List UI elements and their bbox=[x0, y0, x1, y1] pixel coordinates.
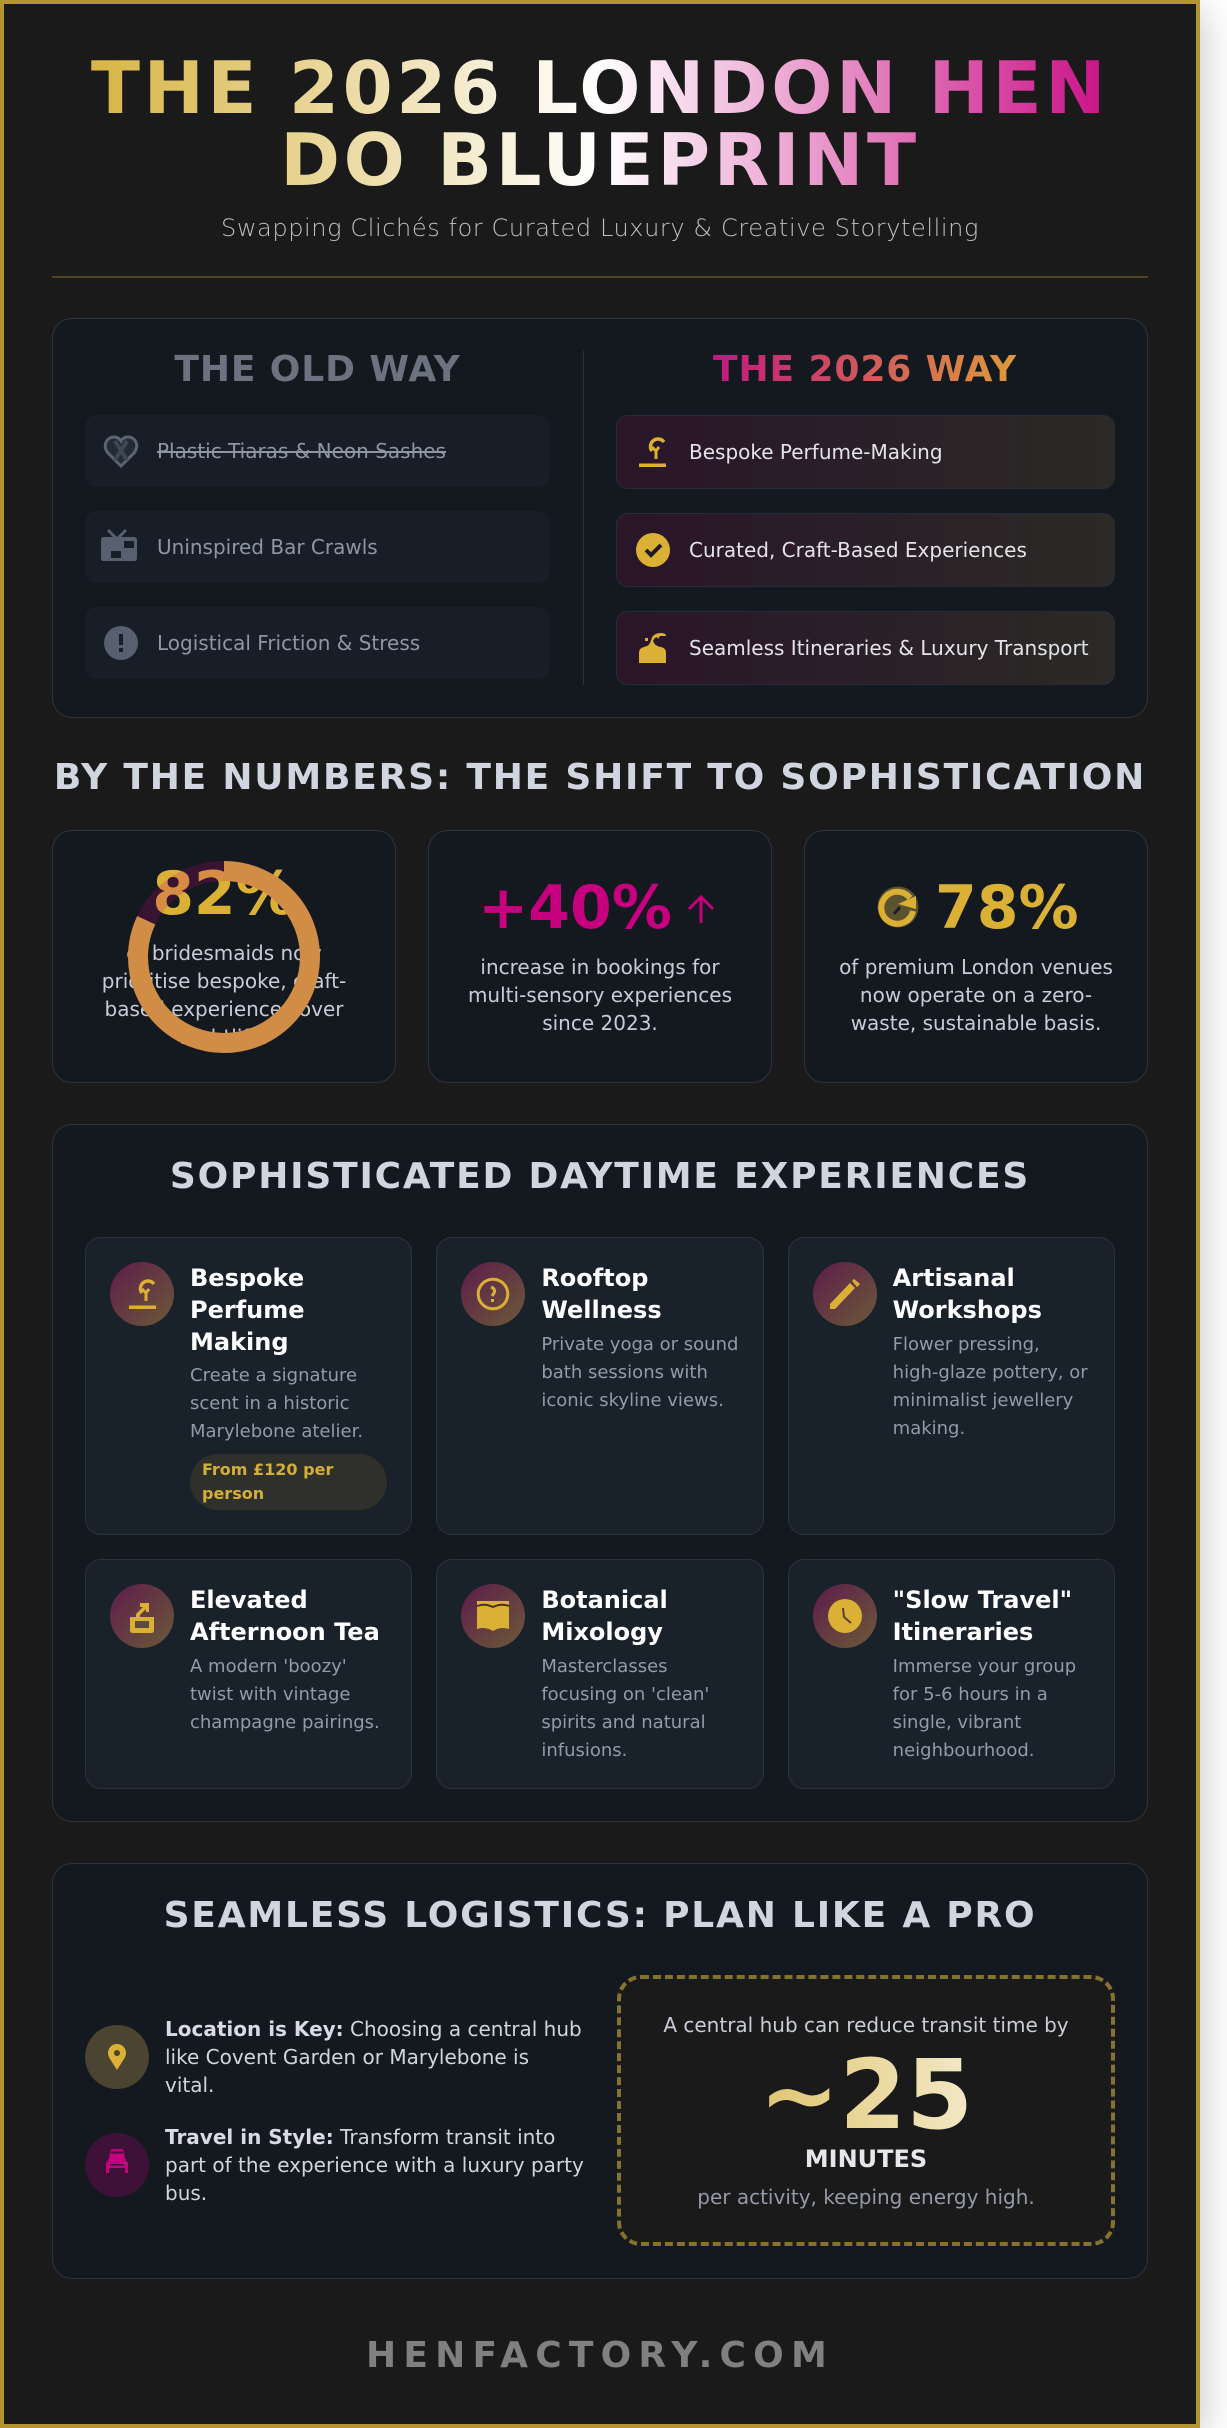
card: artisanal workshops bbox=[788, 1237, 1115, 1535]
stat text 78%: waste, sustainable basis. bbox=[851, 1011, 1101, 1035]
card title: "Slow Travel" bbox=[893, 1586, 1072, 1614]
stat card: 78% bbox=[804, 830, 1148, 1083]
text: location is key: vital. bbox=[165, 2073, 214, 2097]
new item: seamless: Seamless Itineraries & Luxury Transport bbox=[689, 636, 1089, 660]
card title: Making bbox=[190, 1328, 289, 1356]
card title: Itineraries bbox=[893, 1618, 1033, 1646]
stat text 82%: nightlife. bbox=[180, 1025, 268, 1049]
card title: Mixology bbox=[541, 1618, 663, 1646]
card title bbox=[190, 1264, 305, 1356]
stat text 82%: of bridesmaids now bbox=[126, 941, 322, 965]
card description: Create a signature bbox=[190, 1365, 357, 1386]
card description: spirits and natural bbox=[541, 1712, 706, 1733]
icon: perfume bbox=[110, 1262, 174, 1326]
card description: champagne pairings. bbox=[190, 1712, 380, 1733]
card title bbox=[541, 1586, 668, 1646]
subtitle: Swapping Clichés for Curated Luxury & Creative Storytelling bbox=[221, 214, 979, 242]
icon: clock bbox=[813, 1584, 877, 1648]
card description: Marylebone atelier. bbox=[190, 1421, 363, 1442]
stat text +40% bbox=[468, 955, 732, 1035]
card title bbox=[541, 1264, 662, 1324]
text: location is key: like Covent Garden or Marylebone is bbox=[165, 2045, 529, 2069]
card description: Masterclasses bbox=[541, 1656, 668, 1677]
heading: logistics: SEAMLESS LOGISTICS: PLAN LIKE A PRO bbox=[164, 1895, 1036, 1936]
card description bbox=[541, 1334, 738, 1411]
new item: curated bbox=[616, 513, 1115, 587]
card description: iconic skyline views. bbox=[541, 1390, 724, 1411]
icon: crossed heart bbox=[104, 436, 138, 468]
heading: experiences: SOPHISTICATED DAYTIME EXPERIENCES bbox=[170, 1156, 1030, 1197]
card title: Workshops bbox=[893, 1296, 1042, 1324]
card description: infusions. bbox=[541, 1740, 627, 1761]
card description bbox=[893, 1334, 1088, 1439]
new item: perfume bbox=[616, 415, 1115, 489]
card description bbox=[893, 1656, 1076, 1761]
stat text 82%: prioritise bespoke, craft- bbox=[102, 969, 346, 993]
card description: A modern 'boozy' bbox=[190, 1656, 347, 1677]
card description bbox=[541, 1656, 709, 1761]
donut chart: 82% bbox=[128, 861, 320, 1053]
card: bespoke perfume making bbox=[85, 1237, 412, 1535]
card description: single, vibrant bbox=[893, 1712, 1021, 1733]
title bbox=[52, 52, 1148, 196]
stat text 78%: of premium London venues bbox=[839, 955, 1113, 979]
stat text 82%: based experiences over bbox=[105, 997, 343, 1021]
panel: sophisticated daytime experiences bbox=[52, 1124, 1148, 1822]
card description: twist with vintage bbox=[190, 1684, 350, 1705]
card title bbox=[190, 1586, 380, 1646]
card description: Flower pressing, bbox=[893, 1334, 1040, 1355]
stat number +40%: +40% bbox=[478, 873, 672, 943]
card title: Botanical bbox=[541, 1586, 668, 1614]
card title: Artisanal bbox=[893, 1264, 1015, 1292]
new item: curated: Curated, Craft-Based Experiences bbox=[689, 538, 1027, 562]
old item: plastic tiaras: Plastic Tiaras & Neon Sashes bbox=[157, 439, 446, 463]
icon: pencil bbox=[813, 1262, 877, 1326]
icon: warning bbox=[104, 626, 138, 660]
price badge: From £120 per bbox=[202, 1460, 333, 1479]
stat text 82% bbox=[102, 941, 346, 1049]
stat text +40%: multi-sensory experiences bbox=[468, 983, 732, 1007]
stat number 78%: 78% bbox=[935, 873, 1079, 943]
card title: Bespoke bbox=[190, 1264, 304, 1292]
card description: Immerse your group bbox=[893, 1656, 1076, 1677]
stat card: 82% bbox=[52, 830, 396, 1083]
price badge bbox=[190, 1454, 387, 1510]
old item: plastic tiaras bbox=[85, 415, 550, 487]
old item: bar crawls: Uninspired Bar Crawls bbox=[157, 535, 378, 559]
icon: up arrow bbox=[688, 895, 714, 923]
card description: neighbourhood. bbox=[893, 1740, 1034, 1761]
icon: car bbox=[85, 2133, 149, 2197]
callout note: per activity, keeping energy high. bbox=[697, 2185, 1035, 2209]
heading: the old way: THE OLD WAY bbox=[174, 349, 461, 390]
new item: perfume: Bespoke Perfume-Making bbox=[689, 440, 943, 464]
card title: Perfume bbox=[190, 1296, 305, 1324]
icon: location pin bbox=[85, 2025, 149, 2089]
icon: tea bbox=[110, 1584, 174, 1648]
card description: focusing on 'clean' bbox=[541, 1684, 709, 1705]
callout number bbox=[617, 2047, 1115, 2143]
heading: by the numbers: BY THE NUMBERS: THE SHIFT TO SOPHISTICATION bbox=[54, 757, 1146, 798]
icon: recycle bbox=[878, 886, 918, 928]
stat card: +40% bbox=[428, 830, 772, 1083]
card description: scent in a historic bbox=[190, 1393, 350, 1414]
icon: tv bbox=[101, 529, 137, 561]
card description: for 5-6 hours in a bbox=[893, 1684, 1048, 1705]
callout: transit time saving bbox=[617, 1975, 1115, 2246]
card description: Private yoga or sound bbox=[541, 1334, 738, 1355]
card title: Afternoon Tea bbox=[190, 1618, 380, 1646]
text: travel in style: part of the experience with a luxury party bbox=[165, 2153, 584, 2177]
card title: Wellness bbox=[541, 1296, 662, 1324]
panel: seamless logistics bbox=[52, 1863, 1148, 2279]
card description bbox=[190, 1365, 363, 1442]
card: slow travel itineraries bbox=[788, 1559, 1115, 1789]
callout intro: A central hub can reduce transit time by bbox=[663, 2013, 1069, 2037]
card description: making. bbox=[893, 1418, 965, 1439]
card description: high-glaze pottery, or bbox=[893, 1362, 1088, 1383]
text: travel in style: bus. bbox=[165, 2181, 207, 2205]
panel: old way vs 2026 way bbox=[52, 318, 1148, 718]
card description: minimalist jewellery bbox=[893, 1390, 1073, 1411]
callout unit: MINUTES bbox=[805, 2145, 927, 2173]
footer brand: HENFACTORY.COM bbox=[366, 2335, 834, 2376]
text: location is key bbox=[165, 2017, 582, 2097]
title: THE 2026 LONDON HEN bbox=[91, 46, 1109, 130]
text: travel in style bbox=[165, 2125, 584, 2205]
text: travel in style: Travel in Style: Transform transit into bbox=[165, 2125, 555, 2149]
title: DO BLUEPRINT bbox=[280, 118, 920, 202]
card description: bath sessions with bbox=[541, 1362, 708, 1383]
icon: perfume bbox=[639, 437, 666, 467]
callout number: ~25 bbox=[759, 2039, 973, 2151]
heading: the 2026 way: THE 2026 WAY bbox=[713, 349, 1017, 390]
new item: seamless bbox=[616, 611, 1115, 685]
card: rooftop wellness bbox=[436, 1237, 764, 1535]
stat text 78%: now operate on a zero- bbox=[860, 983, 1092, 1007]
old item: bar crawls bbox=[85, 511, 550, 583]
card: botanical mixology bbox=[436, 1559, 764, 1789]
icon: book bbox=[461, 1584, 525, 1648]
stat text +40%: since 2023. bbox=[542, 1011, 658, 1035]
stat text 78% bbox=[839, 955, 1113, 1035]
old item: logistical friction bbox=[85, 607, 550, 679]
icon: island bbox=[639, 633, 666, 663]
stat number 82%: 82% bbox=[152, 859, 296, 929]
card title: Elevated bbox=[190, 1586, 308, 1614]
card title bbox=[893, 1586, 1072, 1646]
old item: logistical friction: Logistical Friction & Stress bbox=[157, 631, 420, 655]
icon: wellness bbox=[461, 1262, 525, 1326]
card description bbox=[190, 1656, 380, 1733]
card: elevated afternoon tea bbox=[85, 1559, 412, 1789]
price badge: person bbox=[202, 1484, 264, 1503]
icon: check bbox=[636, 533, 670, 567]
card title: Rooftop bbox=[541, 1264, 648, 1292]
text: location is key: Location is Key: Choosing a central hub bbox=[165, 2017, 582, 2041]
stat text +40%: increase in bookings for bbox=[480, 955, 720, 979]
card title bbox=[892, 1264, 1042, 1324]
